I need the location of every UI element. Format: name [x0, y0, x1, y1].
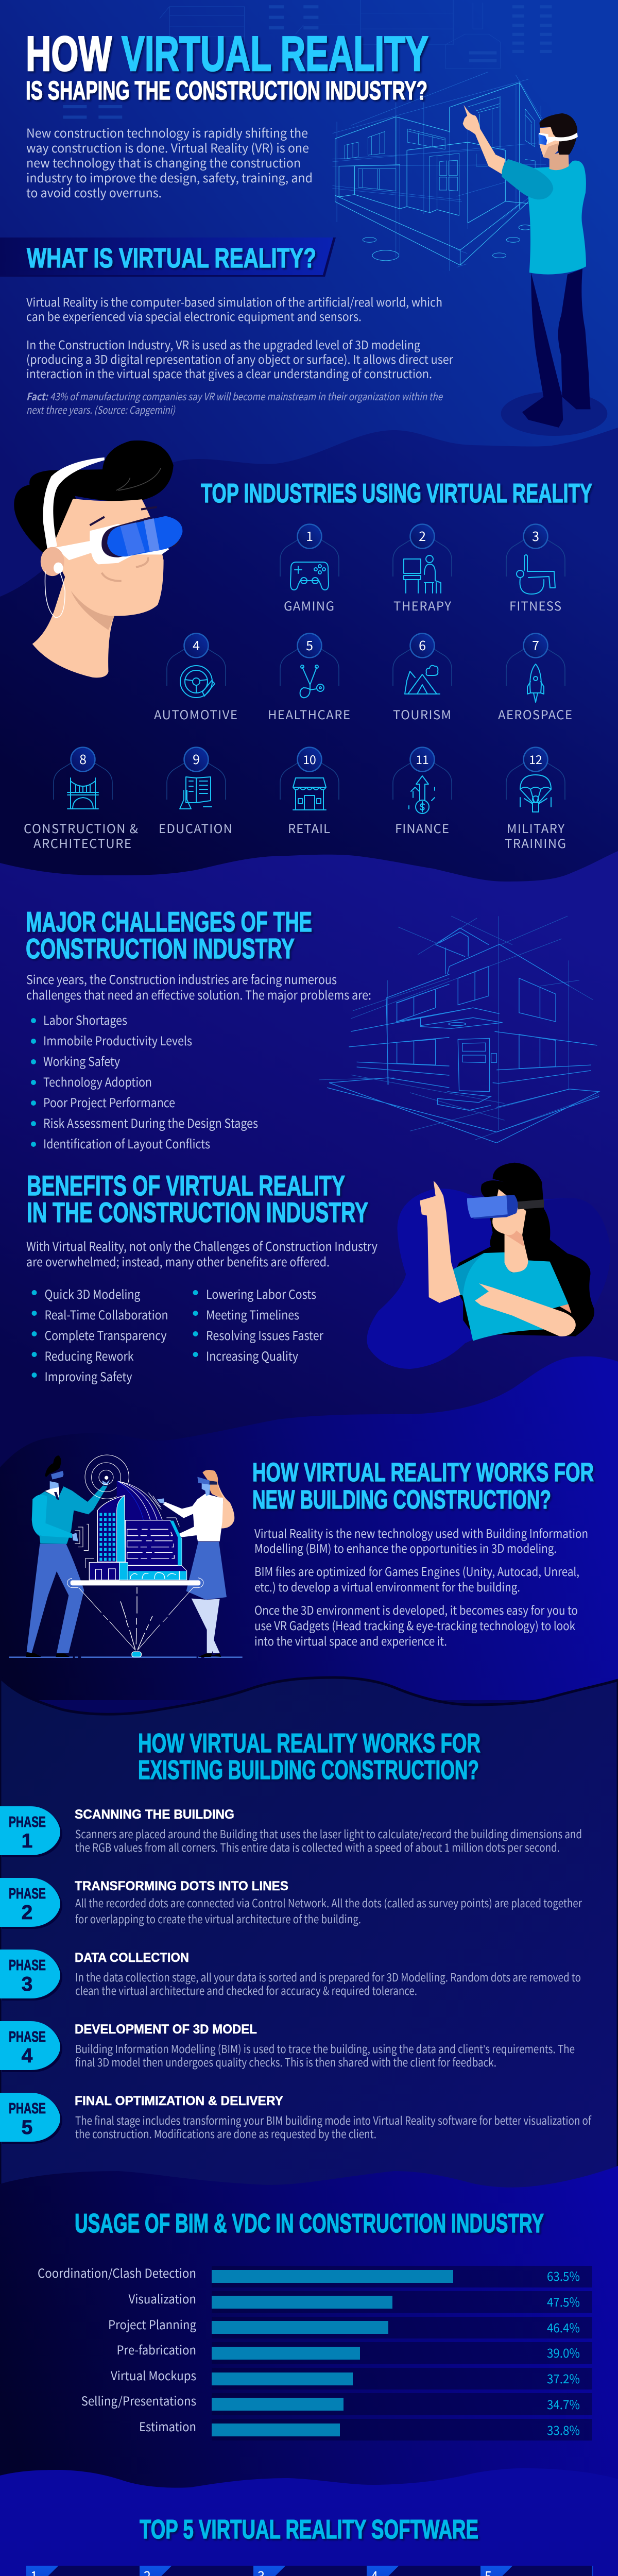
phase 4: 4	[22, 2045, 33, 2067]
phase 5: PHASE	[9, 2100, 46, 2117]
industry 5: healthcare: HEALTHCARE	[268, 705, 350, 723]
benefits list: column one: Improving Safety	[44, 1367, 132, 1385]
industry 6: tourism: 6	[419, 636, 426, 654]
industry 7: aerospace: AEROSPACE	[498, 705, 572, 723]
phase 2: for overlapping to create the virtual architecture of the building.	[75, 1910, 361, 1927]
industry 3: fitness: 3	[532, 527, 539, 545]
intro text block: way construction is done. Virtual Reality (VR) is one	[26, 138, 309, 156]
phase 4: final 3D model then undergoes quality checks. This is then shared with the client for feedback.	[75, 2054, 496, 2070]
title	[26, 26, 428, 105]
heading banner: what is virtual reality: WHAT IS VIRTUAL REALITY?	[27, 243, 316, 274]
title: VIRTUAL REALITY	[122, 26, 428, 81]
industry 10: retail: RETAIL	[288, 819, 330, 837]
software card 2: unreal engine 4	[140, 2566, 253, 2576]
challenges bullet list: Technology Adoption	[43, 1072, 152, 1090]
industry 1: gaming: 1	[306, 527, 313, 545]
background: navy phases section	[0, 1677, 618, 2195]
industry 7: aerospace	[498, 634, 572, 723]
background: bright right gradient section	[0, 1357, 618, 1700]
industry 12: military training: TRAINING	[505, 834, 566, 852]
industry 9: education: EDUCATION	[159, 819, 232, 837]
phase 1	[0, 1806, 582, 1857]
bar chart: BIM and VDC usage: Selling/Presentations	[81, 2391, 196, 2409]
definition text block: In the Construction Industry, VR is used as the upgraded level of 3D modeling	[26, 335, 420, 353]
phase 1: PHASE	[9, 1814, 46, 1831]
bar chart: BIM and VDC usage: 39.0%	[547, 2343, 580, 2361]
industry 9: education: 9	[193, 750, 200, 768]
intro text block: New construction technology is rapidly shifting the	[26, 123, 308, 141]
industry 11: finance	[393, 747, 452, 837]
background: indigo challenges section	[0, 851, 618, 1473]
challenges intro text: Since years, the Construction industries are facing numerous	[26, 970, 337, 988]
phase 4: DEVELOPMENT OF 3D MODEL	[75, 2022, 257, 2037]
background: chart section	[0, 2166, 618, 2488]
software card 1: unity 3D	[26, 2566, 140, 2576]
new building text block: Modelling (BIM) to enhance the opportunities in 3D modeling.	[254, 1539, 557, 1556]
intro text block: to avoid costly overruns.	[26, 183, 162, 201]
benefits intro text: are overwhelmed; instead, many other benefits are offered.	[26, 1252, 330, 1270]
heading: how VR works for existing building	[138, 1728, 480, 1785]
new building text block	[254, 1524, 588, 1649]
new building text block: etc.) to develop a virtual environment for the building.	[254, 1578, 520, 1595]
heading: benefits: BENEFITS OF VIRTUAL REALITY	[27, 1170, 345, 1201]
industry 1: gaming	[280, 524, 339, 614]
phase 3: 3	[22, 1973, 32, 1995]
heading banner: what is virtual reality	[0, 238, 336, 277]
heading: major challenges	[26, 906, 312, 964]
phase 4	[0, 2021, 575, 2072]
industry 10: retail: 10	[303, 750, 316, 768]
definition text block: interaction in the virtual space that gives a clear understanding of construction.	[26, 364, 432, 382]
illustration: two people viewing hologram building	[9, 1455, 243, 1657]
bar chart: BIM and VDC usage: Estimation	[139, 2417, 196, 2435]
bar chart: BIM and VDC usage: 34.7%	[547, 2395, 580, 2413]
heading: major challenges: MAJOR CHALLENGES OF THE	[26, 906, 312, 938]
woman figure	[157, 1470, 234, 1657]
new building text block: BIM files are optimized for Games Engines (Unity, Autocad, Unreal,	[254, 1562, 579, 1580]
new building text block: Once the 3D environment is developed, it becomes easy for you to	[254, 1601, 578, 1618]
bar chart: BIM and VDC usage: Virtual Mockups	[111, 2366, 196, 2384]
fact callout: 43% of manufacturing companies say VR will become mainstream in their organization within the	[50, 388, 443, 403]
benefits list: column one	[32, 1284, 168, 1385]
intro text block: new technology that is changing the construction	[26, 153, 301, 171]
background: top section	[0, 0, 618, 618]
intro text block	[26, 123, 313, 201]
challenges intro text: challenges that need an effective solution. The major problems are:	[26, 985, 371, 1003]
ground line	[9, 1655, 243, 1659]
hologram building	[75, 1481, 187, 1580]
benefits list: column one: Reducing Rework	[44, 1346, 134, 1364]
definition text block: (producing a 3D digital representation of any object or surface). It allows direct user	[26, 350, 453, 367]
phase 2: 2	[22, 1902, 32, 1924]
wireframe house illustration	[319, 916, 599, 1143]
bar chart: BIM and VDC usage: 46.4%	[547, 2318, 580, 2336]
industry 10: retail	[280, 747, 339, 837]
heading: benefits: IN THE CONSTRUCTION INDUSTRY	[27, 1196, 368, 1228]
industry 5: healthcare: 5	[306, 636, 313, 654]
fact callout: next three years. (Source: Capgemini)	[26, 402, 176, 417]
bar chart: BIM and VDC usage: Project Planning	[108, 2315, 196, 2333]
definition text block: can be experienced via special electronic equipment and sensors.	[26, 307, 362, 325]
phase 3: clean the virtual architecture and checked for accuracy & required tolerance.	[75, 1982, 417, 1998]
phase 3: PHASE	[9, 1957, 46, 1974]
industry 1: gaming: GAMING	[284, 596, 334, 614]
industry 11: finance: 11	[416, 750, 429, 768]
definition text block: Virtual Reality is the computer-based simulation of the artificial/real world, which	[26, 293, 442, 310]
industry 11: finance: FINANCE	[395, 819, 449, 837]
software card 3: cryengine	[253, 2566, 367, 2576]
benefits intro text: With Virtual Reality, not only the Challenges of Construction Industry	[26, 1236, 377, 1255]
new building text block: Virtual Reality is the new technology used with Building Information	[254, 1524, 588, 1541]
challenges bullet list: Poor Project Performance	[43, 1093, 175, 1111]
wireframe building illustration	[332, 72, 546, 271]
challenges bullet list: Risk Assessment During the Design Stages	[43, 1113, 258, 1131]
phase 2	[0, 1878, 582, 1929]
industry 2: therapy: THERAPY	[393, 596, 451, 614]
heading: how VR works for new building	[252, 1458, 594, 1514]
bar chart: BIM and VDC usage: 33.8%	[547, 2420, 580, 2438]
heading: top 5 software: TOP 5 VIRTUAL REALITY SOFTWARE	[140, 2515, 478, 2545]
phase 5	[0, 2093, 592, 2144]
phase 1: 1	[22, 1830, 32, 1852]
figure: woman wearing VR headset	[367, 1163, 610, 1369]
industry 4: automotive: AUTOMOTIVE	[154, 705, 237, 723]
title: HOW	[26, 26, 112, 81]
industry 4: automotive: 4	[193, 636, 200, 654]
new building text block: into the virtual space and experience it.	[254, 1632, 447, 1649]
background: software and references section	[0, 2468, 618, 2576]
challenges bullet list	[31, 1010, 258, 1152]
bar chart: BIM and VDC usage: 47.5%	[547, 2292, 580, 2310]
industry 4: automotive	[154, 634, 237, 723]
fact callout	[26, 388, 443, 417]
figure: man wearing VR goggles pointing	[463, 105, 607, 436]
phase 2: TRANSFORMING DOTS INTO LINES	[75, 1879, 288, 1893]
industry 12: military training: 12	[529, 750, 542, 768]
phase 1: SCANNING THE BUILDING	[75, 1807, 234, 1822]
bar chart: BIM and VDC usage: 37.2%	[547, 2369, 580, 2387]
bar chart: BIM and VDC usage: Pre-fabrication	[116, 2340, 196, 2358]
industry 9: education	[159, 747, 232, 837]
challenges bullet list: Immobile Productivity Levels	[43, 1031, 192, 1049]
industry 8: construction and architecture	[24, 747, 138, 852]
industry 7: aerospace: 7	[532, 636, 539, 654]
challenges intro text	[26, 970, 371, 1003]
industry 2: therapy: 2	[419, 527, 426, 545]
industry 8: construction and architecture: ARCHITECTURE	[33, 834, 131, 852]
benefits list: column two: Meeting Timelines	[206, 1305, 299, 1323]
bar chart: BIM and VDC usage	[38, 2263, 592, 2441]
benefits list: column two	[193, 1284, 324, 1364]
hologram target circles	[85, 1455, 129, 1499]
industry 12: military training: MILITARY	[507, 819, 564, 837]
benefits list: column two: Increasing Quality	[206, 1346, 298, 1364]
phase 3: DATA COLLECTION	[75, 1951, 189, 1965]
bar chart: BIM and VDC usage: 63.5%	[547, 2266, 580, 2284]
heading: benefits	[27, 1170, 368, 1228]
industry 3: fitness: FITNESS	[509, 596, 561, 614]
industry 8: construction and architecture: 8	[79, 750, 87, 768]
background: dark wave section	[0, 428, 618, 886]
challenges bullet list: Identification of Layout Conflicts	[43, 1134, 210, 1152]
phase 5: 5	[22, 2116, 32, 2139]
software card 5: amazon lumberyard	[480, 2566, 593, 2576]
benefits intro text	[26, 1236, 377, 1270]
benefits list: column one: Quick 3D Modeling	[44, 1284, 141, 1302]
man figure	[26, 1455, 110, 1657]
benefits list: column one: Complete Transparency	[44, 1326, 167, 1344]
industry 8: construction and architecture: CONSTRUCTION &	[24, 819, 138, 837]
industry 3: fitness	[506, 524, 565, 614]
background: faint city blueprint	[63, 0, 552, 119]
benefits list: column one: Real-Time Collaboration	[44, 1305, 168, 1323]
challenges bullet list: Labor Shortages	[43, 1010, 127, 1028]
figure: head with VR headset	[14, 440, 182, 677]
heading: major challenges: CONSTRUCTION INDUSTRY	[26, 933, 295, 964]
fact callout: Fact:	[26, 388, 48, 403]
phase 4: PHASE	[9, 2029, 46, 2045]
new building text block: use VR Gadgets (Head tracking & eye-tracking technology) to look	[254, 1616, 575, 1634]
bar chart: BIM and VDC usage: Coordination/Clash Detection	[38, 2263, 196, 2281]
phase 3	[0, 1950, 581, 2001]
bar chart: BIM and VDC usage: Visualization	[129, 2289, 196, 2307]
heading: how VR works for existing building: HOW VIRTUAL REALITY WORKS FOR	[138, 1728, 480, 1758]
industry 6: tourism: TOURISM	[393, 705, 451, 723]
phase 4: Building Information Modelling (BIM) is used to trace the building, using the data and client’s requirements. The	[75, 2040, 575, 2057]
table and projector	[67, 1578, 203, 1657]
benefits list: column two: Resolving Issues Faster	[206, 1326, 324, 1344]
title: IS SHAPING THE CONSTRUCTION INDUSTRY?	[26, 76, 427, 105]
benefits list: column two: Lowering Labor Costs	[206, 1284, 316, 1302]
phase 5: FINAL OPTIMIZATION & DELIVERY	[75, 2094, 283, 2108]
definition text block	[26, 293, 453, 382]
intro text block: industry to improve the design, safety, training, and	[26, 168, 313, 186]
phase 2: PHASE	[9, 1886, 46, 1902]
industry 5: healthcare	[268, 634, 350, 723]
industry 12: military training	[505, 747, 566, 852]
industry 6: tourism	[393, 634, 452, 723]
challenges bullet list: Working Safety	[43, 1052, 120, 1070]
phase 5: the construction. Modifications are done as requested by the client.	[75, 2125, 376, 2142]
software card 4: blender	[367, 2566, 480, 2576]
industry 2: therapy	[393, 524, 452, 614]
